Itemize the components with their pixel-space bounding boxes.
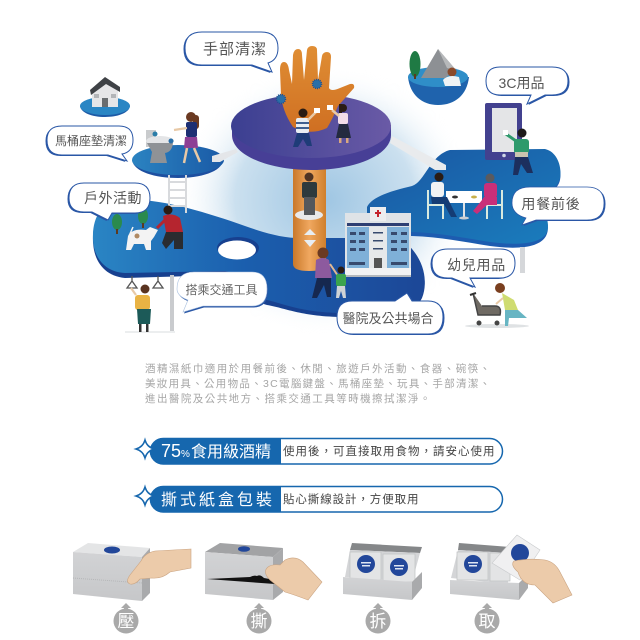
ladder xyxy=(169,175,186,213)
hanging handles and pole xyxy=(125,275,175,333)
hole in platform xyxy=(217,237,259,260)
tablet xyxy=(485,103,522,160)
step label: 撕 xyxy=(246,603,272,634)
pillar xyxy=(293,160,326,271)
pole under right island xyxy=(520,247,525,273)
icon: viruses xyxy=(276,80,322,104)
description paragraph xyxy=(145,362,492,405)
trees xyxy=(112,208,148,234)
bubble: 戶外活動: 戶外活動 xyxy=(84,190,142,206)
bubble: 馬桶座墊清潔 xyxy=(46,126,133,162)
bubble: 戶外活動 xyxy=(68,183,150,221)
bubble: 手部清潔 xyxy=(184,32,278,73)
dog xyxy=(126,227,158,250)
step label: 取: 取 xyxy=(478,612,496,631)
platform: right dining island xyxy=(367,149,560,248)
bubble: 醫院及公共場合 xyxy=(337,293,444,335)
house xyxy=(90,77,120,107)
woman with stroller xyxy=(465,283,529,328)
feature bar: 75% food grade alcohol: 75%食用級酒精 xyxy=(161,441,271,461)
feature bar: 75% food grade alcohol: 使用後，可直接取用食物，請安心使用 xyxy=(283,444,496,458)
hand xyxy=(265,558,322,600)
rock xyxy=(421,49,456,78)
bubble: 3C用品 xyxy=(486,67,570,105)
platform: main left and hospital island xyxy=(93,200,425,317)
description paragraph: 進出醫院及公共地方、搭乘交通工具等時機擦拭潔淨。 xyxy=(145,392,432,405)
staircase: disc to right island xyxy=(390,136,446,170)
small stairs near toilet platform xyxy=(212,149,238,162)
bubble: 搭乘交通工具 xyxy=(177,272,268,314)
hand xyxy=(513,559,572,603)
mother pushing xyxy=(495,283,527,326)
bubble: 搭乘交通工具: 搭乘交通工具 xyxy=(185,282,258,297)
step 3: open box with packets xyxy=(343,543,422,600)
icon: toilet xyxy=(146,130,174,163)
mountain island xyxy=(408,49,469,105)
feature bar: tear-open carton: 撕式紙盒包裝 xyxy=(161,491,275,509)
purple disc xyxy=(231,94,391,170)
diner: woman xyxy=(473,174,497,214)
stroller xyxy=(470,293,500,326)
bubble: 用餐前後: 用餐前後 xyxy=(521,196,581,212)
description paragraph: 酒精濕紙巾適用於用餐前後、休閒、旅遊戶外活動、食器、碗筷、 xyxy=(145,362,492,375)
icon: sparkle xyxy=(136,440,154,458)
step label: 撕: 撕 xyxy=(250,612,268,631)
feature bar: 75% food grade alcohol xyxy=(136,438,502,464)
person: girl in long skirt xyxy=(327,104,351,143)
bubble: 馬桶座墊清潔: 馬桶座墊清潔 xyxy=(55,133,127,148)
feature bar: tear-open carton xyxy=(136,486,502,512)
step 4: take packet xyxy=(450,535,572,603)
step 1: press box xyxy=(73,543,191,601)
background glow xyxy=(175,65,475,335)
icon: sparkle xyxy=(136,487,154,505)
bubble: 手部清潔: 手部清潔 xyxy=(203,41,267,58)
hospital xyxy=(345,207,411,277)
elevator arrows xyxy=(304,229,316,247)
table xyxy=(446,191,482,220)
person: woman cleaning toilet xyxy=(174,112,200,163)
person: child in green xyxy=(336,266,346,298)
chairs xyxy=(428,190,502,219)
step 2: tear box xyxy=(205,543,322,600)
tree xyxy=(410,51,420,77)
step label: 壓 xyxy=(114,603,138,634)
dining scene xyxy=(428,172,502,220)
description paragraph: 美妝用具、公用物品、3C電腦鍵盤、馬桶座墊、玩具、手部清潔、 xyxy=(145,377,491,390)
resting person xyxy=(448,68,456,76)
bubble: 醫院及公共場合: 醫院及公共場合 xyxy=(342,311,434,326)
orange hand xyxy=(280,46,354,132)
person on elevator xyxy=(302,172,317,215)
hand xyxy=(128,549,191,584)
diner: man xyxy=(431,172,457,217)
house island xyxy=(80,77,130,117)
packet xyxy=(492,535,540,580)
person: mother xyxy=(312,248,338,298)
toilet platform xyxy=(132,145,224,178)
feature bar: tear-open carton: 貼心撕線設計，方便取用 xyxy=(283,492,419,506)
person: commuter woman xyxy=(131,284,151,332)
person: child with striped shirt xyxy=(293,108,320,147)
bubble: 3C用品: 3C用品 xyxy=(499,75,544,91)
step label: 拆 xyxy=(366,603,390,634)
elevator disc xyxy=(295,210,323,220)
step label: 取 xyxy=(474,603,500,634)
person: man in red xyxy=(157,206,183,249)
bubble: 用餐前後 xyxy=(512,187,606,226)
person: green shirt wiping tablet xyxy=(503,128,533,175)
step label: 壓: 壓 xyxy=(118,612,134,631)
step label: 拆: 拆 xyxy=(370,612,386,631)
bubble: 幼兒用品: 幼兒用品 xyxy=(447,257,506,273)
bubble: 幼兒用品 xyxy=(430,249,515,288)
